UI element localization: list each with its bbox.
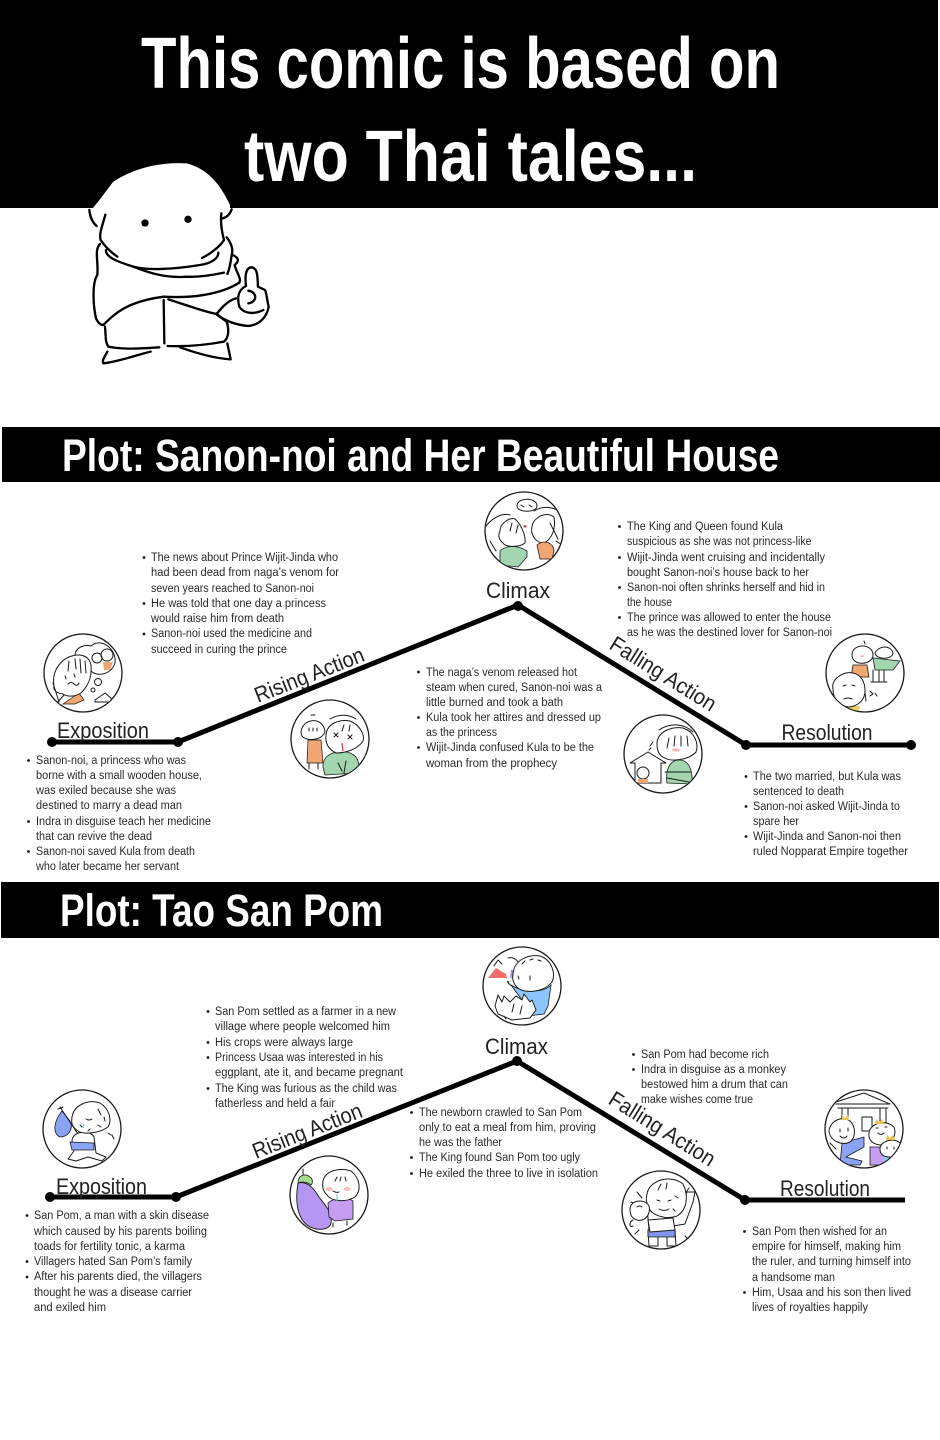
text: rising action: eggplant, ate it, and became pregnant	[215, 1067, 404, 1079]
text: rising action	[207, 1006, 404, 1110]
label: Falling Action: Falling Action	[604, 1086, 720, 1171]
text: climax: little burned and took a bath	[426, 697, 563, 709]
text: resolution: San Pom then wished for an	[752, 1226, 887, 1238]
text: resolution: the ruler, and turning himself into	[752, 1256, 911, 1268]
text: exposition: After his parents died, the villagers	[34, 1271, 202, 1283]
icon: worried girl with thought bubble	[44, 634, 122, 712]
label: Climax: Climax	[485, 1034, 548, 1059]
text: resolution	[745, 771, 908, 858]
label: Rising Action: Rising Action	[249, 1098, 366, 1164]
text: rising action: fatherless and held a fair	[215, 1098, 335, 1110]
title banner: two Thai tales...	[244, 117, 697, 197]
text: rising action: His crops were always large	[215, 1037, 353, 1049]
title banner	[0, 0, 938, 208]
text: climax	[417, 667, 603, 770]
plot line	[47, 601, 916, 750]
text: resolution: Him, Usaa and his son then lived	[752, 1287, 911, 1299]
text: exposition: that can revive the dead	[36, 831, 152, 843]
text: climax: only to eat a meal from him, proving	[419, 1122, 596, 1134]
text: exposition: who later became her servant	[35, 861, 180, 873]
text: rising action: The news about Prince Wijit-Jinda who	[151, 552, 338, 564]
text: climax: Kula took her attires and dressed up	[426, 712, 601, 724]
text: falling action: make wishes come true	[641, 1094, 753, 1106]
icon: prince and Kula	[485, 492, 563, 570]
text: rising action: Princess Usaa was interested in his	[215, 1052, 383, 1064]
text: exposition: destined to marry a dead man	[36, 800, 182, 812]
text: exposition: Sanon-noi, a princess who was	[36, 755, 186, 767]
text: rising action: He was told that one day a princess	[151, 598, 326, 610]
text: falling action: The King and Queen found Kula	[627, 521, 784, 533]
text: exposition	[26, 1210, 209, 1314]
text: rising action: seven years reached to Sanon-noi	[151, 583, 314, 595]
text: resolution: spare her	[753, 816, 799, 828]
text: climax: woman from the prophecy	[425, 758, 557, 770]
text: climax: he was the father	[419, 1137, 502, 1149]
text: resolution: sentenced to death	[753, 786, 844, 798]
text: falling action: as he was the destined lover for Sanon-noi	[627, 627, 832, 639]
text: climax: steam when cured, Sanon-noi was a	[426, 682, 603, 694]
text: falling action: Wijit-Jinda went cruising and incidentally	[627, 552, 825, 564]
plot line	[45, 1056, 905, 1205]
label: Exposition: Exposition	[57, 718, 149, 743]
text: falling action: bought Sanon-noi’s house back to her	[627, 567, 809, 579]
icon: San Pom with bindle	[43, 1090, 121, 1168]
text: exposition: Villagers hated San Pom’s family	[34, 1256, 192, 1268]
label: Climax: Climax	[486, 578, 550, 603]
text: rising action: succeed in curing the prince	[151, 644, 287, 656]
label: Falling Action: Falling Action	[605, 631, 721, 716]
text: climax: Wijit-Jinda confused Kula to be the	[426, 742, 594, 754]
text: exposition: San Pom, a man with a skin disease	[34, 1210, 209, 1222]
text: rising action: had been dead from naga’s venom for	[151, 567, 339, 579]
icon: princess with giant eggplant	[290, 1156, 368, 1234]
text: exposition: Sanon-noi saved Kula from death	[36, 846, 195, 858]
text: rising action: The King was furious as the child was	[215, 1083, 397, 1095]
text: resolution: lives of royalties happily	[752, 1302, 868, 1314]
plot diagram: Sanon-noi	[27, 492, 916, 873]
text: falling action: Indra in disguise as a monkey	[641, 1064, 786, 1076]
text: rising action: village where people welcomed him	[215, 1021, 390, 1033]
icon: sad Kula watching the couple	[826, 634, 904, 712]
text: falling action	[632, 1049, 788, 1106]
text: climax: The King found San Pom too ugly	[419, 1152, 580, 1164]
text: falling action: San Pom had become rich	[641, 1049, 769, 1061]
icon: thumbs-up mascot	[89, 163, 269, 363]
text: exposition: borne with a small wooden house,	[36, 770, 202, 782]
text: climax	[410, 1107, 598, 1180]
icon: prince holding the tiny house	[624, 715, 702, 793]
text: falling action: the house	[627, 597, 672, 609]
title banner: This comic is based on	[141, 24, 780, 104]
text: exposition: toads for fertility tonic, a karma	[34, 1241, 186, 1253]
text: resolution: The two married, but Kula was	[753, 771, 901, 783]
text: resolution: Sanon-noi asked Wijit-Jinda to	[753, 801, 900, 813]
text: climax: He exiled the three to live in isolation	[419, 1168, 598, 1180]
text: climax: The naga’s venom released hot	[426, 667, 578, 679]
section banner: Tao San Pom: Plot: Tao San Pom	[60, 885, 383, 936]
text: resolution: empire for himself, making him	[752, 1241, 901, 1253]
text: rising action: would raise him from death	[150, 613, 284, 625]
icon: baby crawling to San Pom	[483, 947, 561, 1025]
text: falling action: bestowed him a drum that can	[641, 1079, 788, 1091]
text: falling action: The prince was allowed to enter the house	[627, 612, 831, 624]
label: Resolution: Resolution	[782, 720, 872, 745]
text: exposition: which caused by his parents boiling	[33, 1226, 207, 1238]
text: rising action	[143, 552, 339, 656]
text: exposition: and exiled him	[34, 1302, 106, 1314]
text: resolution: ruled Nopparat Empire together	[753, 846, 908, 858]
plot diagram: Tao San Pom	[26, 947, 911, 1314]
icon: San Pom with monkey and drum	[622, 1171, 700, 1249]
text: resolution: a handsome man	[752, 1272, 835, 1284]
text: exposition: was exiled because she was	[35, 785, 176, 797]
text: rising action: Sanon-noi used the medicine and	[151, 628, 312, 640]
text: rising action: San Pom settled as a farmer in a new	[215, 1006, 397, 1018]
text: exposition: thought he was a disease carrier	[34, 1287, 192, 1299]
label: Exposition: Exposition	[56, 1174, 147, 1199]
text: falling action: suspicious as she was not princess-like	[627, 536, 812, 548]
label: Rising Action: Rising Action	[251, 642, 368, 708]
text: resolution	[743, 1226, 911, 1314]
text: falling action	[618, 521, 832, 639]
text: exposition: Indra in disguise teach her medicine	[36, 816, 211, 828]
icon: girl beside fallen prince	[291, 700, 369, 778]
section banner: Tao San Pom	[1, 882, 939, 938]
text: falling action: Sanon-noi often shrinks herself and hid in	[627, 582, 825, 594]
label: Resolution: Resolution	[780, 1176, 870, 1201]
text: climax: as the princess	[426, 727, 497, 739]
icon: royal family at the palace	[825, 1090, 903, 1168]
text: exposition	[27, 755, 211, 873]
section banner: Sanon-noi: Plot: Sanon-noi and Her Beautiful House	[62, 430, 779, 481]
text: resolution: Wijit-Jinda and Sanon-noi then	[753, 831, 901, 843]
text: climax: The newborn crawled to San Pom	[419, 1107, 582, 1119]
